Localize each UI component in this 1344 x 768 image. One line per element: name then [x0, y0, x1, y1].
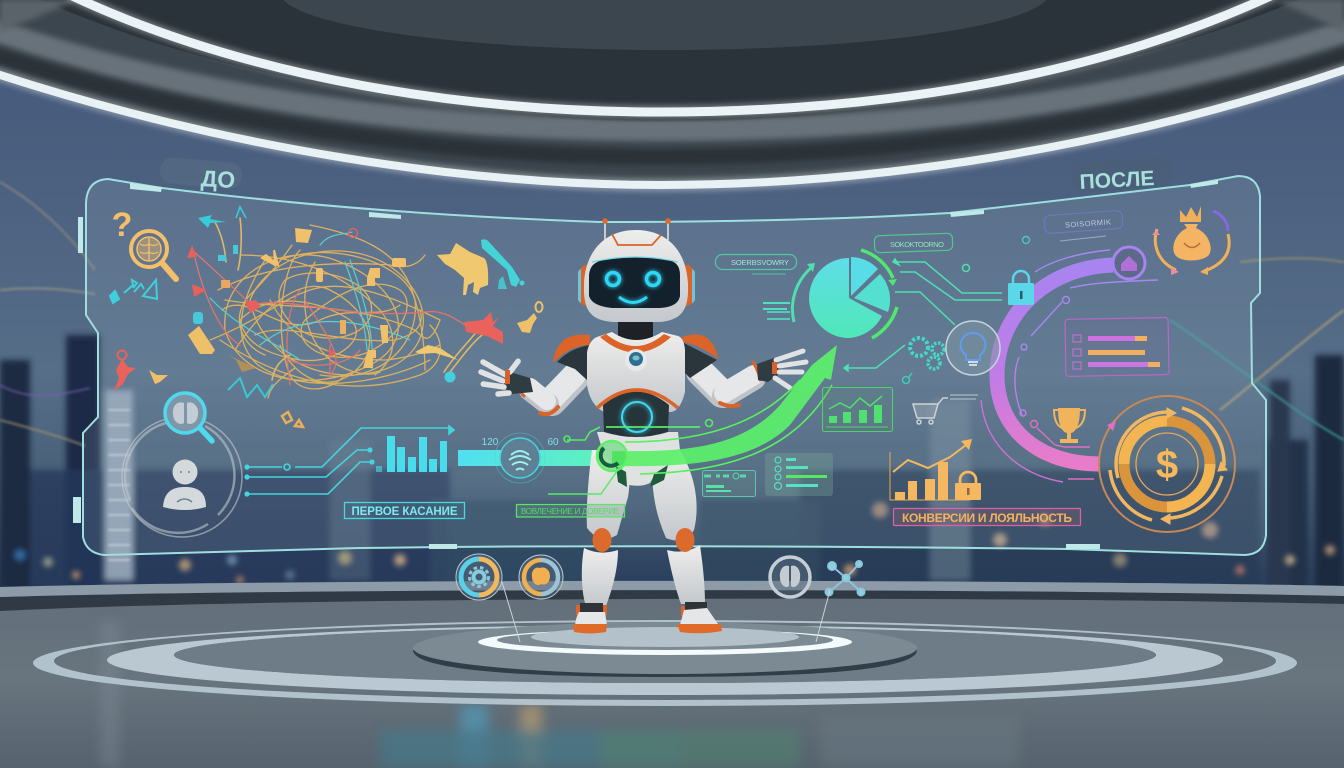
floor light rings: [33, 620, 1297, 706]
right shoulder: [682, 334, 718, 378]
chest badge: [625, 349, 647, 371]
chart: orange rising bars with lock: [890, 439, 981, 500]
left leg: [573, 450, 629, 634]
silhouette: orange wing: [415, 345, 458, 360]
right leg: [652, 450, 722, 633]
floating icon: grey brain ring: [770, 557, 810, 597]
chart: green mini line and bars: [822, 388, 892, 432]
label pill: top right tag: SOISORMIK: [1065, 217, 1111, 230]
silhouette: red shape: [464, 312, 503, 344]
icon: person with ring: [122, 417, 242, 537]
label: green middle box: [516, 504, 624, 517]
silhouette: cyan squiggle: [481, 239, 524, 289]
small orange marks: [282, 412, 303, 427]
label: first touch: ПЕРВОЕ КАСАНИЕ: [352, 506, 458, 518]
label pill: left green tag: [716, 254, 796, 274]
icon: trophy: [1054, 408, 1085, 443]
icon: light bulb: [946, 321, 1000, 375]
floating icon: network: [826, 561, 864, 596]
heading: ПОСЛЕ: [1071, 156, 1173, 194]
icon: crown money bag: [1152, 206, 1229, 275]
neck: [618, 320, 653, 342]
silhouette: orange animal: [437, 243, 488, 295]
red and cyan markers: [187, 207, 456, 382]
heading: ДО: [159, 157, 243, 193]
cyan progress bar with fingerprint node: [458, 433, 593, 483]
arc detail lines: [981, 250, 1158, 482]
dollar sign: $: [1156, 443, 1178, 487]
left arm: [520, 375, 575, 414]
panel: green list: [765, 453, 833, 496]
lower torso: [603, 392, 669, 437]
left shoulder: [553, 335, 590, 380]
left hand: [481, 360, 533, 394]
bar chart: cyan: [376, 436, 447, 472]
heading: ПОСЛЕ: ПОСЛЕ: [1079, 167, 1155, 194]
panel: progress bars: [1065, 318, 1169, 376]
panel: holographic glass screen: [83, 176, 1266, 555]
ceiling with light rings: [0, 0, 1344, 185]
belly band: [597, 390, 678, 408]
robot: [481, 218, 806, 633]
tangled lines: chaos: [192, 218, 482, 398]
label pill: left green tag: SOERBSVOWRY: [731, 258, 789, 267]
panel: small status box: [702, 470, 756, 496]
hips: [597, 432, 680, 486]
label pill: top right tag: [1022, 210, 1123, 244]
arrow to dollar ring: [1068, 478, 1094, 480]
icon: question mark: ?: [112, 206, 132, 244]
label pill: center green tag: SOKOKTOORNO: [890, 240, 944, 249]
right arm: [700, 362, 760, 406]
arrow: green growth arrow: [548, 345, 837, 494]
leader lines: [502, 582, 830, 642]
antennas: [602, 218, 671, 240]
icon: shopping cart: [913, 395, 978, 424]
icon: small orange shape: [149, 370, 168, 384]
panel edge tabs: [73, 180, 1218, 549]
collar: [600, 334, 671, 352]
floating icon: gear ring: [456, 554, 502, 600]
connector lines to lock: [844, 259, 1002, 371]
label pill: center green tag: [874, 233, 953, 253]
icon: purple home node: [1113, 247, 1145, 279]
torso: [587, 332, 685, 412]
right hand: [757, 351, 806, 388]
label: green middle box: ВОВЛЕЧЕНИЕ И ДОВЕРИЕ: [521, 507, 619, 516]
central platform: [413, 622, 917, 677]
tangle nodes: [221, 228, 406, 372]
floor with wall rim: [0, 581, 1344, 768]
icon: magnifier with brain: [131, 231, 176, 279]
label: first touch: [344, 502, 464, 518]
heading: ДО: ДО: [200, 165, 236, 193]
dollar ring: [1099, 396, 1235, 532]
head: [578, 230, 695, 322]
icon: cyan magnifier with brain: [165, 393, 212, 441]
small rings: [902, 373, 912, 384]
icon: gears: [910, 338, 944, 369]
arc: purple journey: [997, 265, 1113, 464]
icon: scattered notes: [110, 280, 157, 303]
background: city skyline behind glass: [0, 0, 1344, 600]
hip joints: [616, 465, 668, 487]
pie chart: [792, 250, 897, 338]
silhouette: orange hook: [517, 302, 542, 333]
chest ring: [622, 402, 652, 432]
cyan progress bar with fingerprint node: 60: [547, 437, 559, 448]
circuit lines: [245, 426, 454, 496]
icon: orange tag: [188, 326, 215, 354]
cyan progress bar with fingerprint node: 120: [482, 437, 499, 448]
floating icon: brain ring: [519, 555, 563, 599]
label: conversion and loyalty: КОНВЕРСИИ И ЛОЯЛЬНОСТЬ: [902, 511, 1072, 525]
zigzag: [228, 378, 273, 397]
icon: cyan lock: [1008, 271, 1034, 305]
icon: red key: [114, 350, 136, 391]
list lines near pie: [763, 302, 790, 320]
